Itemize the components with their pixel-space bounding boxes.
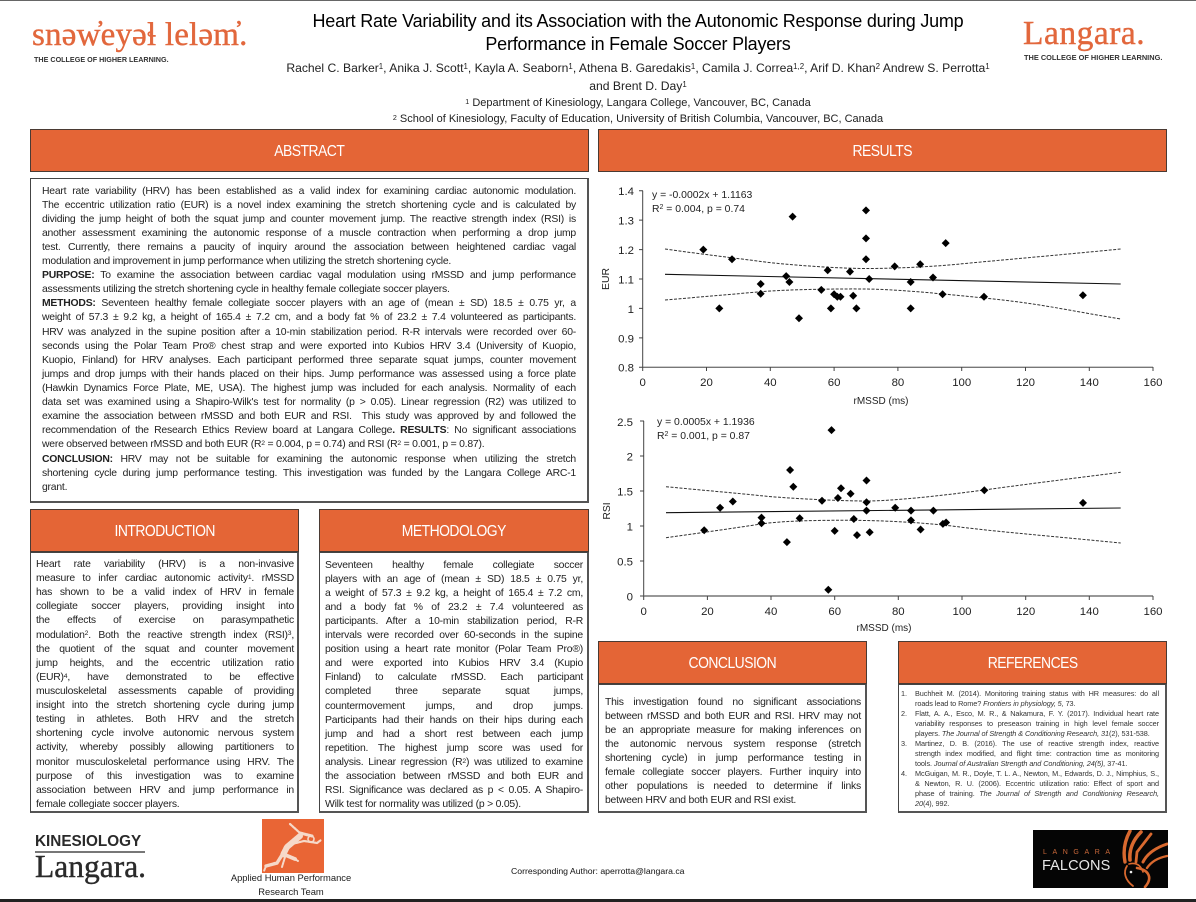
- methodology text: repetition. The highest jump score was used for: [325, 743, 583, 754]
- abstract text: recommendation of the Research Ethics Review board at Langara College. RESULTS: No significant associations: [42, 425, 576, 436]
- logo: Langara: [1023, 15, 1162, 62]
- references list: 3.: [901, 739, 907, 748]
- methodology text: a weight of 57.3 ± 9.2 kg, a height of 165.4 ± 7.2 cm,: [325, 588, 583, 599]
- chart: RSI vs rMSSD: 80: [892, 606, 905, 618]
- chart: EUR vs rMSSD: 1.2: [618, 245, 634, 257]
- methodology text: Finland) to calculate rMSSD. Each participant: [325, 672, 583, 683]
- title: [312, 11, 963, 54]
- chart: RSI vs rMSSD: 40: [765, 606, 777, 618]
- affiliations: 2 School of Kinesiology, Faculty of Education, University of British Columbia, Vancouver, BC, Canada: [393, 113, 883, 125]
- introduction text: insight into the stretch shortening cycle during jump: [36, 700, 294, 711]
- introduction text: the quotient of the squat and counter movement: [36, 644, 294, 655]
- introduction text: has shown to be a valid index of HRV in female: [36, 587, 294, 598]
- abstract text: (Hawkin Dynamics Force Plate, ME, USA). The highest jump was included for each analysis. Normality of each: [42, 383, 576, 394]
- logo: Langara Falcons: FALCONS: [1042, 858, 1110, 874]
- chart: RSI vs rMSSD: = 0.001, p = 0.87: [668, 431, 750, 442]
- chart: EUR vs rMSSD: 1.1: [618, 274, 634, 286]
- introduction text: female collegiate soccer players.: [36, 799, 179, 810]
- introduction text: collegiate soccer players, providing insight into: [36, 601, 294, 612]
- chart: EUR vs rMSSD: rMSSD (ms): [854, 396, 908, 407]
- methodology text: jump and had a short rest between each jump: [325, 729, 583, 740]
- chart: RSI vs rMSSD: 1: [627, 522, 633, 534]
- caption: Applied Human Performance Research Team: Research Team: [258, 886, 324, 897]
- references list: tools. Journal of Australian Strength and Conditioning, 24(5), 37-41.: [915, 759, 1127, 768]
- chart: EUR vs rMSSD: 1: [628, 304, 634, 316]
- chart: RSI vs rMSSD: R: [657, 431, 665, 442]
- abstract text: data set was examined using a Shapiro-Wilk's test for normality (p > 0.05). Linear regression (R2) was utilized to: [42, 397, 576, 408]
- conclusion text: between HRV and both EUR and RSI exist.: [605, 795, 796, 806]
- logo: snəweyəɬ leləm: THE COLLEGE OF HIGHER LEARNING.: [34, 55, 169, 64]
- introduction text: activity, whereby possibly allowing partitioners to: [36, 742, 294, 753]
- abstract text: The eccentric utilization ratio (EUR) is a novel index examining the stretch shortening cycle and is calculated by: [42, 200, 576, 211]
- heading: abstract: [30, 129, 589, 172]
- methodology text: and were exported into Kubios HRV 3.4 (Kupio: [325, 658, 583, 669]
- chart: EUR vs rMSSD: 0.8: [618, 363, 634, 375]
- methodology text: and a body fat % of 23.2 ± 7.4 volunteered as: [325, 602, 583, 613]
- methodology text: players with an age of (mean ± SD) 18.5 ± 0.75 yr,: [325, 574, 583, 585]
- introduction text: jump heights, and the eccentric utilization ratio: [36, 658, 294, 669]
- abstract text: seconds using the Polar Team Pro® chest strap and were exported into Kubios HRV 3.4 (University of Kuopio,: [42, 341, 576, 352]
- heading: conclusion: CONCLUSION: [689, 655, 776, 672]
- authors: and Brent D. Day1: [589, 79, 687, 93]
- introduction text: [36, 559, 294, 810]
- logo: Langara: Langara.: [1023, 15, 1145, 52]
- methodology text: Wilk test for normality was utilized (p > 0.05).: [325, 799, 521, 810]
- logo: snəweyəɬ leləm: snəw̓eyəɬ leləm̓.: [32, 17, 248, 53]
- methodology text: analysis. Linear regression (R2) was utilized to examine: [325, 757, 583, 768]
- affiliations: [393, 97, 884, 125]
- chart: EUR vs rMSSD: EUR: [601, 268, 612, 290]
- chart: EUR vs rMSSD: 1.4: [618, 186, 634, 198]
- chart: RSI vs rMSSD: 160: [1143, 606, 1163, 618]
- heading: methodology: METHODOLOGY: [402, 523, 506, 540]
- conclusion text: be an appropriate measure for making inferences on: [605, 725, 861, 736]
- abstract text: examine the association between rMSSD and both EUR and RSI. This study was approved by and followed the: [42, 411, 576, 422]
- chart: EUR vs rMSSD: 80: [892, 377, 904, 389]
- chart: EUR vs rMSSD: 1.3: [618, 216, 634, 228]
- introduction text: purpose of this investigation was to examine: [36, 771, 294, 782]
- conclusion text: female collegiate soccer players. Further inquiry into: [605, 767, 861, 778]
- methodology text: position using a heart rate monitor (Polar Team Pro®): [325, 644, 583, 655]
- heading: introduction: INTRODUCTION: [114, 523, 215, 540]
- conclusion text: [605, 696, 862, 806]
- chart: EUR vs rMSSD: 0.9: [618, 333, 634, 345]
- chart: EUR vs rMSSD: R: [652, 204, 660, 215]
- chart: EUR vs rMSSD: [601, 186, 1163, 407]
- heading: methodology: [319, 509, 589, 552]
- introduction text: modulation2. Both the reactive strength index (RSI)3,: [36, 630, 294, 641]
- introduction text: measure to infer cardiac autonomic activity1. rMSSD: [36, 573, 294, 584]
- chart: RSI vs rMSSD: 20: [701, 606, 714, 618]
- methodology text: Participants had their hands on their hips during each: [325, 715, 583, 726]
- methodology text: [324, 560, 584, 810]
- heading: conclusion: [598, 641, 867, 684]
- chart: EUR vs rMSSD: 40: [764, 377, 777, 389]
- introduction text: (EUR)4, have demonstrated to be effective: [36, 672, 294, 683]
- conclusion text: other populations is needed to determine if links: [605, 781, 861, 792]
- logo: Kinesiology Langara: Langara.: [35, 849, 146, 884]
- methodology text: Seventeen healthy female collegiate soccer: [325, 560, 583, 570]
- abstract text: Kuopio, Finland) for HRV analyses. Each participant performed three separate squat jumps, counter movement: [42, 355, 576, 366]
- chart: RSI vs rMSSD: y = 0.0005x + 1.1936: [657, 417, 755, 428]
- references list: Martinez, D. B. (2016). The use of reactive strength index, reactive: [915, 739, 1159, 748]
- abstract text: HRV was analyzed in the supine position after a 10-min stabilization period. R-R intervals were recorded over 60-: [42, 327, 576, 338]
- logo: Langara: THE COLLEGE OF HIGHER LEARNING.: [1024, 53, 1162, 62]
- authors: Rachel C. Barker1, Anika J. Scott1, Kayla A. Seaborn1, Athena B. Garedakis1, Camila J. Correa1,2, Arif D. Khan2 Andrew S. Perrotta1: [286, 61, 990, 75]
- references list: 1.: [901, 689, 907, 698]
- abstract text: grant.: [42, 482, 67, 493]
- references list: [901, 689, 1159, 808]
- chart: RSI vs rMSSD: 120: [1016, 606, 1035, 618]
- authors: [286, 61, 990, 93]
- references list: McGuigan, M. R., Doyle, T. L. A., Newton, M., Edwards, D. J., Nimphius, S.,: [915, 769, 1159, 778]
- chart: RSI vs rMSSD: rMSSD (ms): [856, 623, 912, 634]
- logo: Langara Falcons: [1033, 830, 1168, 888]
- chart: RSI vs rMSSD: 1.5: [617, 486, 633, 498]
- references list: roads lead to Rome? Frontiers in physiology, 5, 73.: [915, 699, 1075, 708]
- abstract text: modulation and improvement in jump performance when utilizing the stretch shortening cycle.: [42, 256, 451, 267]
- abstract text: another assessment examining the autonomic response of a muscle contraction when performing a drop jump: [42, 228, 576, 239]
- references list: strength index modified, and flight time: contraction time as monitoring: [915, 749, 1159, 758]
- chart: RSI vs rMSSD: 60: [828, 606, 841, 618]
- chart: RSI vs rMSSD: 2.5: [617, 417, 633, 429]
- references list: 4.: [901, 769, 907, 778]
- chart: RSI vs rMSSD: 0.5: [617, 556, 633, 568]
- abstract text: test. Currently, there remains a paucity of inquiry around the association between heightened cardiac vagal: [42, 242, 576, 253]
- references list: Buchheit M. (2014). Monitoring training status with HR measures: do all: [915, 689, 1159, 698]
- methodology text: RSI. Significance was declared as p < 0.05. A Shapiro-: [325, 785, 583, 796]
- conclusion text: This investigation found no significant associations: [605, 696, 861, 708]
- abstract text: PURPOSE: To examine the association between cardiac vagal modulation using rMSSD and jump performance: [42, 270, 576, 281]
- references list: 2.: [901, 709, 907, 718]
- chart: EUR vs rMSSD: y = -0.0002x + 1.1163: [652, 190, 753, 201]
- references list: players. The Journal of Strength & Conditioning Research, 31(2), 531-538.: [915, 729, 1150, 738]
- heading: abstract: ABSTRACT: [274, 143, 345, 160]
- chart: EUR vs rMSSD: = 0.004, p = 0.74: [663, 204, 745, 215]
- chart: RSI vs rMSSD: 100: [952, 606, 972, 618]
- chart: EUR vs rMSSD: 0: [640, 377, 646, 389]
- panel: conclusion: [598, 641, 867, 813]
- abstract text: dividing the jump height of both the squat jump and counter movement jump. The reactive strength index (RSI) is: [42, 214, 576, 225]
- chart: RSI vs rMSSD: 0: [641, 606, 647, 618]
- caption: Applied Human Performance Research Team: [230, 872, 351, 897]
- abstract text: shortening cycle during jump performance testing. This investigation was funded by the Langara College ARC-1: [42, 468, 576, 479]
- heading: introduction: [30, 509, 299, 552]
- logo: Kinesiology Langara: [35, 833, 146, 884]
- abstract text: were observed between rMSSD and both EUR (R2 = 0.004, p = 0.74) and RSI (R2 = 0.001, p = 0.87).: [42, 439, 484, 450]
- introduction text: association between HRV and jump performance in: [36, 785, 294, 796]
- chart: EUR vs rMSSD: 100: [952, 377, 971, 389]
- chart: EUR vs rMSSD: 160: [1143, 377, 1163, 389]
- heading: results: RESULTS: [853, 143, 912, 160]
- panel: introduction: [30, 509, 299, 813]
- references list: Flatt, A. A., Esco, M. R., & Nakamura, F. Y. (2017). Individual heart rate: [915, 709, 1159, 718]
- methodology text: completed three separate squat jumps,: [325, 686, 583, 697]
- panel: references: [898, 641, 1167, 813]
- introduction text: musculoskeletal assessments capable of providing: [36, 686, 294, 697]
- logo: Langara Falcons: LANGARA: [1043, 849, 1116, 856]
- chart: RSI vs rMSSD: RSI: [602, 502, 613, 520]
- chart: RSI vs rMSSD: 2: [627, 452, 633, 464]
- heading: references: [898, 641, 1167, 684]
- methodology text: participants. After a 10-min stabilization period, R-R: [325, 616, 583, 627]
- abstract text: METHODS: Seventeen healthy female collegiate soccer players with an age of (mean ± SD) 18.5 ± 0.75 yr, a: [42, 298, 576, 309]
- references list: 20(4), 992.: [915, 799, 949, 808]
- introduction text: monitor musculoskeletal performance using HRV. The: [36, 757, 294, 768]
- chart: EUR vs rMSSD: 140: [1080, 377, 1099, 389]
- abstract text: jumps and drop jumps with their hands placed on their hips. Jump performance was assessed using a force plate: [42, 369, 576, 380]
- introduction text: testing in athletes. Both HRV and the stretch: [36, 714, 294, 725]
- abstract text: [42, 186, 576, 493]
- methodology text: intervals were recorded over 60-seconds in the supine: [325, 630, 583, 641]
- references list: phase of training. The Journal of Strength and Conditioning Research,: [915, 789, 1159, 798]
- conclusion text: between rMSSD and both EUR and RSI. HRV may not: [605, 711, 861, 722]
- references list: & Newton, R. U. (2006). Eccentric utilization ratio: Effect of sport and: [915, 779, 1159, 788]
- corresponding author: Corresponding Author: aperrotta@langara.ca: [511, 866, 685, 876]
- logo: Kinesiology Langara: KINESIOLOGY: [35, 833, 141, 850]
- title: Performance in Female Soccer Players: [485, 34, 791, 54]
- chart: EUR vs rMSSD: 2: [660, 204, 664, 211]
- heading: results: [598, 129, 1167, 172]
- caption: Applied Human Performance Research Team: Applied Human Performance: [231, 872, 351, 883]
- conclusion text: shortening cycle) in jump performance testing in: [605, 753, 861, 764]
- chart: RSI vs rMSSD: 140: [1080, 606, 1099, 618]
- chart: RSI vs rMSSD: 2: [665, 431, 669, 438]
- chart: RSI vs rMSSD: [602, 417, 1163, 634]
- abstract text: weight of 57.3 ± 9.2 kg, a height of 165.4 ± 7.2 cm, and a body fat % of 23.2 ± 7.4 volunteered as participants.: [42, 312, 576, 323]
- abstract text: assessments utilizing the stretch shortening cycle in healthy female collegiate soccer players.: [42, 284, 450, 295]
- title: Heart Rate Variability and its Association with the Autonomic Response during Jump: [312, 11, 963, 31]
- chart: EUR vs rMSSD: 20: [700, 377, 713, 389]
- affiliations: 1 Department of Kinesiology, Langara College, Vancouver, BC, Canada: [465, 97, 811, 109]
- methodology text: the association between rMSSD and both EUR and: [325, 771, 583, 782]
- panel: abstract: [30, 129, 589, 503]
- heading: references: REFERENCES: [988, 655, 1077, 672]
- references list: variability responses to preseason training in high level female soccer: [915, 719, 1159, 728]
- chart: EUR vs rMSSD: 120: [1016, 377, 1035, 389]
- abstract text: Heart rate variability (HRV) has been established as a valid index for examining cardiac autonomic modulation.: [42, 186, 576, 196]
- conclusion text: the autonomic nervous system response (stretch: [605, 739, 861, 750]
- introduction text: shortening cycle involve autonomic nervous system: [36, 728, 294, 739]
- chart: EUR vs rMSSD: 60: [828, 377, 840, 389]
- panel: methodology: [319, 509, 589, 813]
- chart: RSI vs rMSSD: 0: [627, 592, 633, 604]
- introduction text: Heart rate variability (HRV) is a non-invasive: [36, 559, 294, 570]
- abstract text: CONCLUSION: HRV may not be suitable for examining the autonomic response when utilizing the stretch: [42, 454, 576, 465]
- icon: Applied Human Performance runner: [262, 819, 324, 873]
- methodology text: countermovement jumps, and drop jumps.: [325, 701, 583, 712]
- introduction text: the effects of exercise on parasympathetic: [36, 615, 294, 626]
